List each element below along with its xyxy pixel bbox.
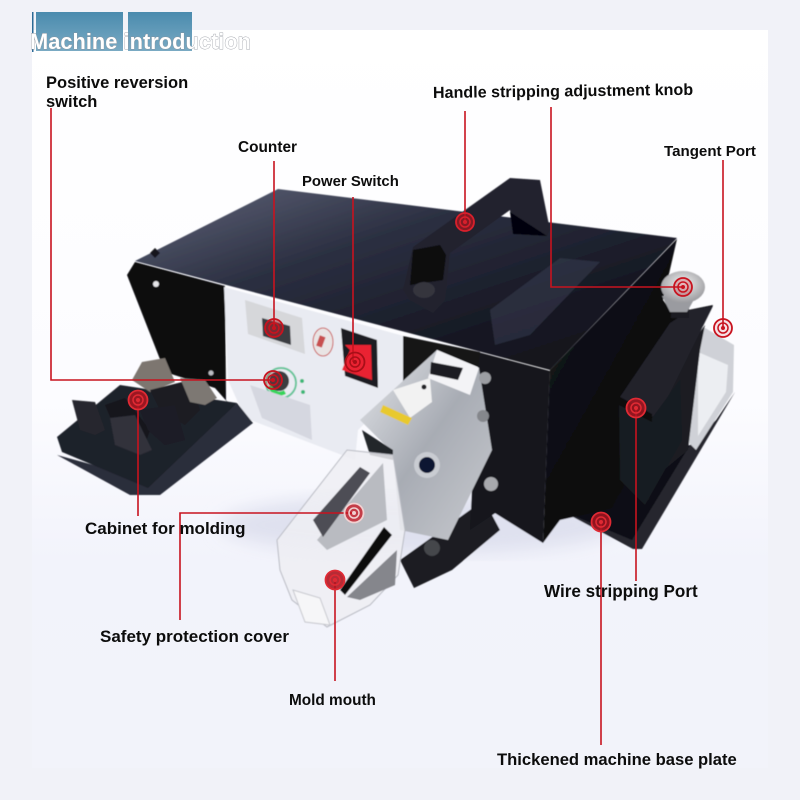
marker: adjustment knob (674, 278, 692, 296)
machine photo (57, 178, 735, 627)
silver mold head (360, 350, 492, 540)
marker: mold mouth (326, 570, 344, 590)
label: handle stripping adjustment knob: Handle stripping adjustment knob (433, 81, 693, 102)
marker: wire stripping port (626, 398, 646, 418)
front dark face (478, 352, 550, 543)
label: counter: Counter (238, 139, 297, 156)
rear bracket (620, 306, 713, 418)
toggle switch (313, 328, 333, 356)
marker: handle (456, 213, 474, 231)
label: tangent port: Tangent Port (664, 143, 756, 160)
marker: safety cover (344, 504, 364, 522)
control panel (224, 287, 404, 460)
label: mold mouth: Mold mouth (289, 692, 376, 709)
knob (671, 300, 689, 318)
label: cabinet for molding: Cabinet for molding (85, 519, 246, 538)
handle (403, 178, 550, 313)
callout lines (51, 107, 723, 745)
label: positive reversion switch: switch (46, 93, 97, 111)
base plate (560, 392, 735, 549)
red power switch (341, 328, 378, 388)
ground shadow (220, 495, 620, 555)
marker: cabinet (128, 390, 148, 410)
dies (72, 400, 105, 435)
marker: positive reversion switch (264, 371, 282, 389)
dark gap beside mold head (403, 336, 480, 385)
clear safety cover (277, 450, 405, 627)
dark head bracket (470, 365, 500, 530)
cover top (135, 189, 677, 370)
label: wire stripping port: Wire stripping Port (544, 582, 698, 601)
counter display (245, 300, 305, 354)
bolts (479, 372, 491, 384)
label: power switch: Power Switch (302, 174, 399, 190)
label: safety protection cover: Safety protection cover (100, 627, 289, 646)
label: positive reversion switch: Positive reversion (46, 74, 188, 92)
silver rear block (684, 325, 734, 450)
marker: base plate (592, 512, 610, 532)
marker: tangent port (714, 319, 732, 337)
tray (57, 403, 253, 495)
left shell (127, 262, 245, 422)
marker: counter (265, 319, 283, 337)
title: Machine introduction (30, 29, 251, 54)
title banner (32, 12, 192, 52)
label: thickened machine base plate: Thickened machine base plate (497, 750, 737, 769)
marker: power switch (346, 352, 364, 372)
right face (543, 239, 713, 543)
direction switch (266, 368, 296, 398)
